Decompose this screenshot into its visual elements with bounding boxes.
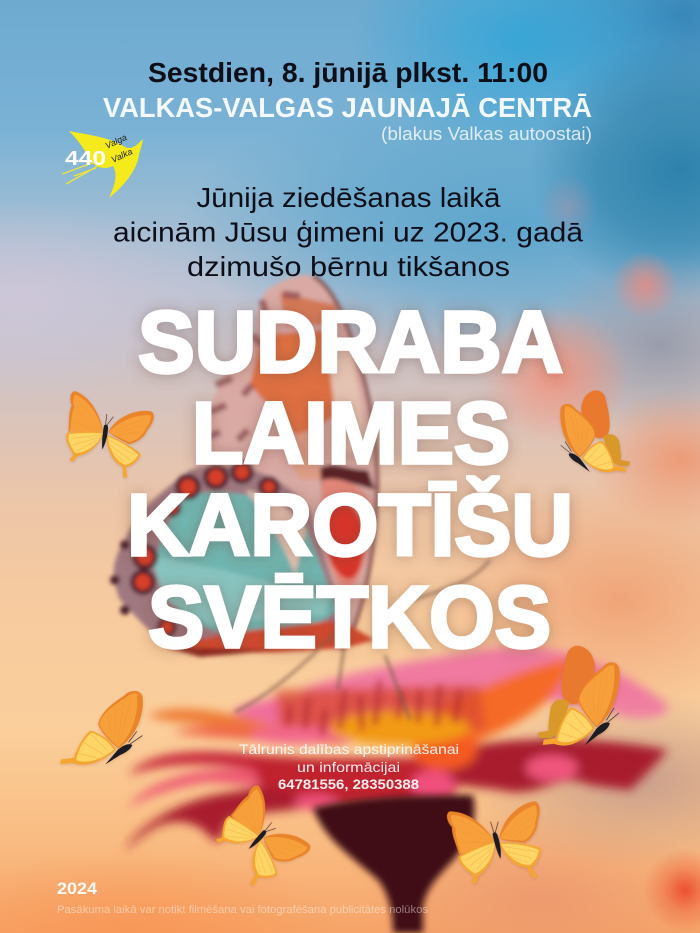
main title: SVĒTKOS bbox=[148, 569, 551, 666]
legs bbox=[235, 560, 490, 720]
phone text: 64781556, 28350388 bbox=[278, 776, 419, 792]
invitation text: dzimušo bērnu tikšanos bbox=[187, 251, 510, 282]
butterfly: right side bbox=[538, 646, 620, 746]
butterfly: left side bbox=[60, 691, 143, 765]
stamen zone bbox=[275, 685, 485, 730]
side petals right bbox=[440, 739, 668, 792]
pink top petals bbox=[300, 647, 668, 720]
phone text: Tālrunis dalības apstiprināšanai bbox=[239, 741, 459, 757]
date heading: Sestdien, 8. jūnijā plkst. 11:00 bbox=[148, 57, 548, 88]
phone text: un informācijai bbox=[297, 759, 400, 775]
orange wedge bbox=[425, 658, 570, 780]
invitation text bbox=[113, 182, 583, 282]
flower bbox=[125, 647, 668, 933]
butterfly: top left bbox=[66, 391, 154, 477]
butterfly: bottom right bbox=[441, 780, 563, 901]
main title: SUDRABA bbox=[138, 294, 563, 391]
logo script bbox=[104, 132, 134, 165]
venue heading: VALKAS-VALGAS JAUNAJĀ CENTRĀ bbox=[103, 94, 592, 123]
invitation text: aicinām Jūsu ģimeni uz 2023. gadā bbox=[113, 216, 583, 248]
year: 2024 bbox=[57, 879, 98, 898]
hindwing bbox=[114, 466, 345, 650]
logo script: Valga bbox=[104, 132, 128, 151]
side petals left bbox=[147, 709, 290, 730]
forewing bbox=[195, 275, 377, 650]
phone text bbox=[239, 741, 459, 792]
stamens bbox=[288, 680, 460, 735]
venue note: (blakus Valkas autoostai) bbox=[381, 124, 592, 144]
main title: KAROTĪŠU bbox=[127, 476, 573, 574]
big butterfly bbox=[110, 275, 490, 720]
butterfly: bottom centre bbox=[204, 781, 323, 900]
logo: yellow swallow bbox=[62, 131, 143, 198]
main title bbox=[127, 294, 573, 666]
calyx and stem bbox=[313, 795, 474, 933]
logo script: Valka bbox=[110, 146, 134, 165]
main title: LAIMES bbox=[192, 385, 510, 482]
logo number: 440 bbox=[65, 148, 106, 170]
flower centre bbox=[330, 711, 470, 745]
disclaimer: Pasākuma laikā var notikt filmēšana vai fotografēšana publicitātes nolūkos bbox=[57, 904, 429, 916]
invitation text: Jūnija ziedēšanas laikā bbox=[196, 182, 501, 213]
butterfly: top right bbox=[560, 390, 630, 472]
